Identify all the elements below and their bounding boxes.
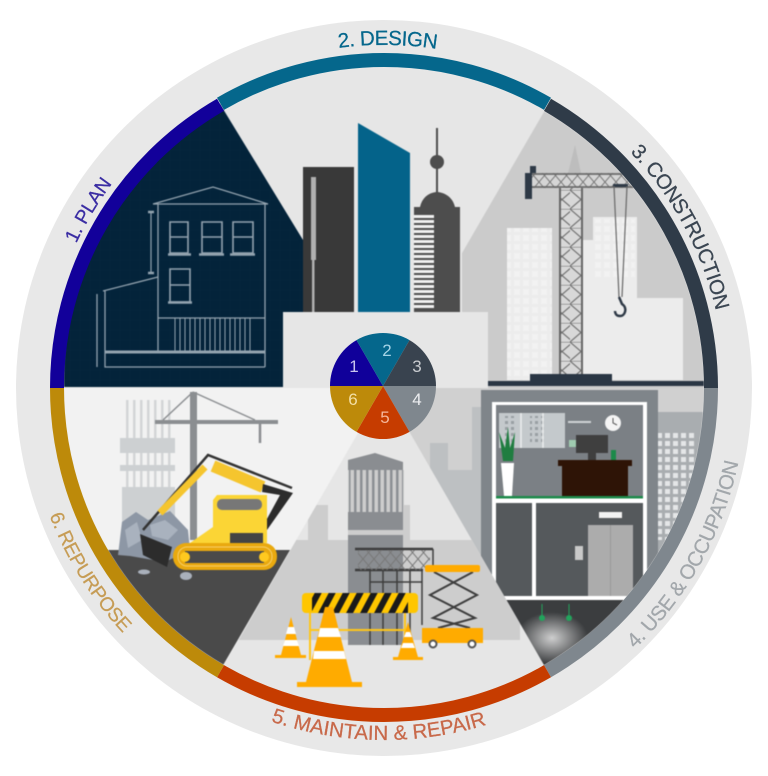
icon: house blueprint	[96, 186, 269, 368]
label: 5. MAINTAIN & REPAIR: 5. MAINTAIN & REPAIR	[272, 708, 486, 740]
ring segment: construction	[548, 105, 711, 388]
desk	[558, 460, 632, 496]
office building	[481, 390, 658, 675]
gray sky	[462, 100, 720, 388]
label: 2. DESIGN: 2. DESIGN	[338, 30, 437, 49]
buildings	[507, 217, 683, 380]
ring segment: design	[220, 60, 548, 104]
rubble	[118, 511, 192, 580]
blue tower	[358, 123, 410, 312]
ground slab	[488, 374, 708, 386]
pie numbers	[348, 341, 422, 427]
room: office	[496, 405, 643, 498]
icon: tower crane	[524, 147, 634, 375]
pie slices	[330, 333, 436, 439]
outer progress ring	[57, 60, 711, 715]
blueprint background	[64, 104, 303, 387]
monitor	[576, 435, 608, 460]
scissor lift	[422, 565, 483, 648]
label: 6. REPURPOSE: 6. REPURPOSE	[50, 512, 132, 633]
spire tower	[414, 128, 460, 312]
dark tower	[303, 167, 354, 312]
scaffold	[355, 549, 433, 645]
ring segment: plan	[57, 105, 220, 388]
building with dots	[658, 412, 703, 552]
pie numbers: 4	[412, 390, 422, 409]
tower under repair	[348, 453, 403, 645]
clock	[605, 415, 621, 431]
pie numbers: 6	[348, 390, 358, 409]
ground	[108, 549, 290, 665]
pie numbers: 2	[382, 341, 392, 360]
faded building	[120, 400, 176, 522]
panel: wheel artwork	[64, 104, 704, 688]
plant	[501, 463, 514, 496]
label: 3. CONSTRUCTION: 3. CONSTRUCTION	[632, 144, 730, 310]
icon: excavator	[140, 455, 293, 570]
label: 4. USE & OCCUPATION: 4. USE & OCCUPATION	[630, 460, 738, 646]
panel: 5 maintain and repair	[239, 452, 544, 688]
ring segment: maintain and repair	[220, 671, 548, 715]
panel: 2 design background	[64, 68, 704, 708]
wall posters	[499, 413, 565, 448]
panel: 3 construction	[462, 100, 720, 388]
city silhouette	[230, 470, 520, 640]
podium	[283, 312, 488, 387]
traffic cones	[275, 607, 423, 687]
background crane	[155, 392, 278, 540]
room: lobby	[496, 503, 643, 596]
panel: 6 repurpose	[64, 388, 358, 665]
center pie	[330, 333, 436, 439]
pie numbers: 3	[412, 357, 422, 376]
ring segment: use and occupation	[548, 388, 711, 671]
label: 1. PLAN: 1. PLAN	[66, 176, 112, 242]
panel: 4 use and occupation	[410, 388, 704, 666]
city silhouette	[430, 407, 481, 554]
pie numbers: 5	[380, 408, 390, 427]
background	[64, 388, 384, 665]
barrier	[302, 593, 418, 660]
ring segment: repurpose	[57, 388, 220, 671]
background	[410, 388, 704, 470]
basement	[506, 600, 624, 665]
panel: 2 design towers	[283, 123, 488, 387]
panel: 1 plan	[64, 104, 303, 387]
background	[520, 624, 544, 665]
pie numbers: 1	[349, 357, 359, 376]
